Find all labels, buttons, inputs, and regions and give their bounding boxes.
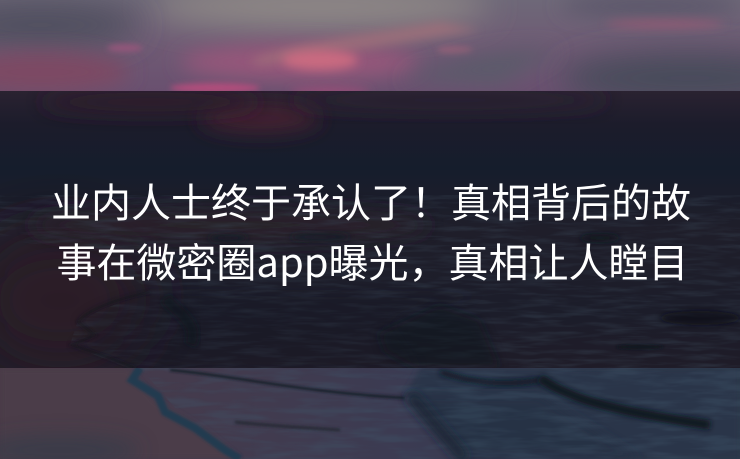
title: 事在微密圈app曝光，真相让人瞠目 — [56, 231, 689, 289]
title: 业内人士终于承认了！真相背后的故 — [51, 171, 691, 229]
title — [51, 171, 691, 289]
